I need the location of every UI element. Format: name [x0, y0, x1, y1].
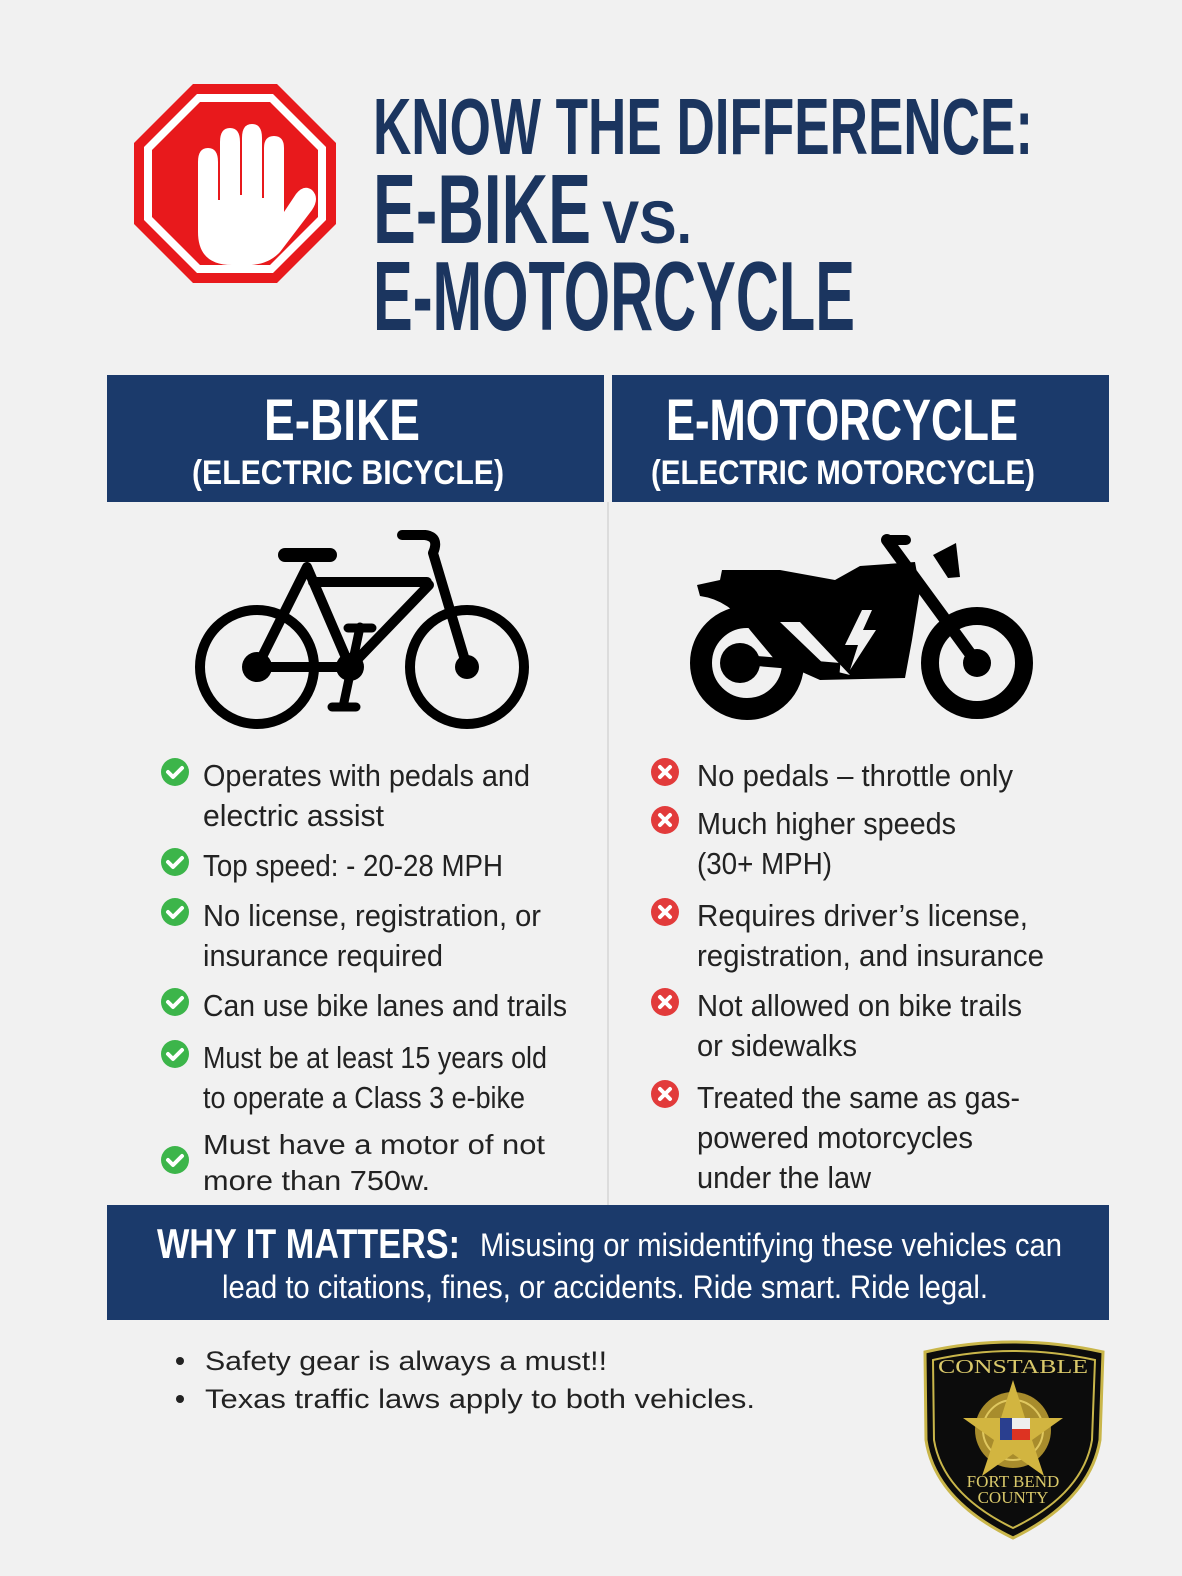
panel header: e-bike: E-BIKE: [264, 388, 420, 453]
panel header: e-bike: [107, 375, 604, 502]
icon: stop sign with hand: [134, 84, 336, 283]
title: E-BIKE: [373, 154, 591, 264]
list: e-bike pros: insurance required: [203, 938, 443, 973]
panel header: e-motorcycle: (ELECTRIC MOTORCYCLE): [651, 454, 1035, 492]
title: E-MOTORCYCLE: [373, 241, 855, 351]
list: e-bike pros: Can use bike lanes and trails: [203, 988, 567, 1023]
callout: why it matters: [107, 1205, 1109, 1320]
list: e-bike pros: Top speed: - 20-28 MPH: [203, 848, 503, 883]
list: e-bike pros: Must have a motor of not: [203, 1129, 545, 1160]
panel header: e-bike: (ELECTRIC BICYCLE): [192, 454, 504, 492]
list: e-bike pros: [161, 758, 567, 1196]
list: e-motorcycle cons: or sidewalks: [697, 1028, 857, 1063]
icon: constable badge: FORT BEND: [967, 1472, 1059, 1491]
list: e-motorcycle cons: registration, and insurance: [697, 938, 1044, 973]
list: e-motorcycle cons: No pedals – throttle only: [697, 758, 1013, 793]
list: e-bike pros: electric assist: [203, 798, 384, 833]
list: e-motorcycle cons: Treated the same as gas-: [697, 1080, 1020, 1115]
list: e-bike pros: Must be at least 15 years old: [203, 1040, 547, 1075]
list: e-bike pros: No license, registration, or: [203, 898, 541, 933]
list: e-motorcycle cons: powered motorcycles: [697, 1120, 973, 1155]
callout: why it matters: lead to citations, fines, or accidents. Ride smart. Ride legal.: [222, 1269, 988, 1305]
title: VS.: [602, 189, 692, 256]
panel header: e-motorcycle: E-MOTORCYCLE: [666, 388, 1018, 453]
list: e-bike pros: more than 750w.: [203, 1165, 430, 1196]
callout: why it matters: WHY IT MATTERS:: [157, 1220, 460, 1267]
text block: safety bullets: Safety gear is always a must!!: [205, 1346, 607, 1376]
list: e-motorcycle cons: under the law: [697, 1160, 872, 1195]
text block: safety bullets: [176, 1346, 755, 1414]
callout: why it matters: Misusing or misidentifying these vehicles can: [480, 1227, 1062, 1263]
list: e-motorcycle cons: Requires driver’s license,: [697, 898, 1028, 933]
list: e-bike pros: to operate a Class 3 e-bike: [203, 1080, 525, 1115]
icon: electric motorcycle: [697, 540, 1024, 710]
list: e-motorcycle cons: Not allowed on bike trails: [697, 988, 1022, 1023]
list: e-motorcycle cons: [651, 758, 1044, 1195]
icon: constable badge: [925, 1342, 1103, 1538]
list: e-motorcycle cons: (30+ MPH): [697, 846, 832, 881]
list: e-bike pros: Operates with pedals and: [203, 758, 530, 793]
icon: bicycle: [200, 535, 524, 724]
text block: safety bullets: Texas traffic laws apply to both vehicles.: [205, 1384, 755, 1414]
title: [373, 82, 1033, 351]
icon: constable badge: COUNTY: [978, 1488, 1048, 1507]
icon: constable badge: CONSTABLE: [938, 1356, 1088, 1378]
panel header: e-motorcycle: [612, 375, 1109, 502]
list: e-motorcycle cons: Much higher speeds: [697, 806, 956, 841]
